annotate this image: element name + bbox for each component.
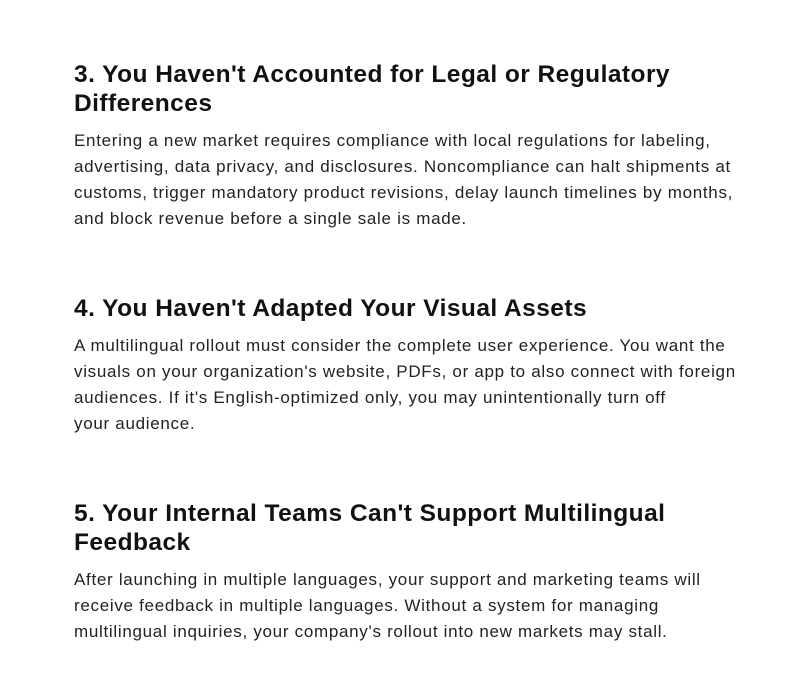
body text 5: After launching in multiple languages, your support and marketing teams will: [74, 570, 701, 589]
heading 3: Differences: [74, 90, 212, 117]
heading 5: 5. Your Internal Teams Can't Support Multilingual: [74, 500, 665, 527]
heading 5: [74, 500, 665, 556]
body text 4: [74, 336, 736, 433]
body text 5: multilingual inquiries, your company's rollout into new markets may stall.: [74, 622, 668, 641]
heading 3: [74, 61, 670, 117]
body text 4: audiences. If it's English-optimized only, you may unintentionally turn off: [74, 388, 666, 407]
body text 4: your audience.: [74, 414, 195, 433]
body text 3: and block revenue before a single sale is made.: [74, 209, 467, 228]
body text 3: Entering a new market requires compliance with local regulations for labeling,: [74, 131, 711, 150]
heading 3: 3. You Haven't Accounted for Legal or Regulatory: [74, 61, 670, 88]
heading 5: Feedback: [74, 529, 191, 556]
body text 5: receive feedback in multiple languages. Without a system for managing: [74, 596, 659, 615]
section 4: visual assets: [74, 295, 736, 433]
section 3: legal differences: [74, 61, 733, 228]
body text 3: [74, 131, 733, 228]
body text 4: visuals on your organization's website, PDFs, or app to also connect with foreign: [74, 362, 736, 381]
heading 4: 4. You Haven't Adapted Your Visual Assets: [74, 295, 587, 322]
body text 4: A multilingual rollout must consider the complete user experience. You want the: [74, 336, 726, 355]
body text 3: customs, trigger mandatory product revisions, delay launch timelines by months,: [74, 183, 733, 202]
body text 5: [74, 570, 701, 641]
body text 3: advertising, data privacy, and disclosures. Noncompliance can halt shipments at: [74, 157, 731, 176]
section 5: internal teams: [74, 500, 701, 641]
